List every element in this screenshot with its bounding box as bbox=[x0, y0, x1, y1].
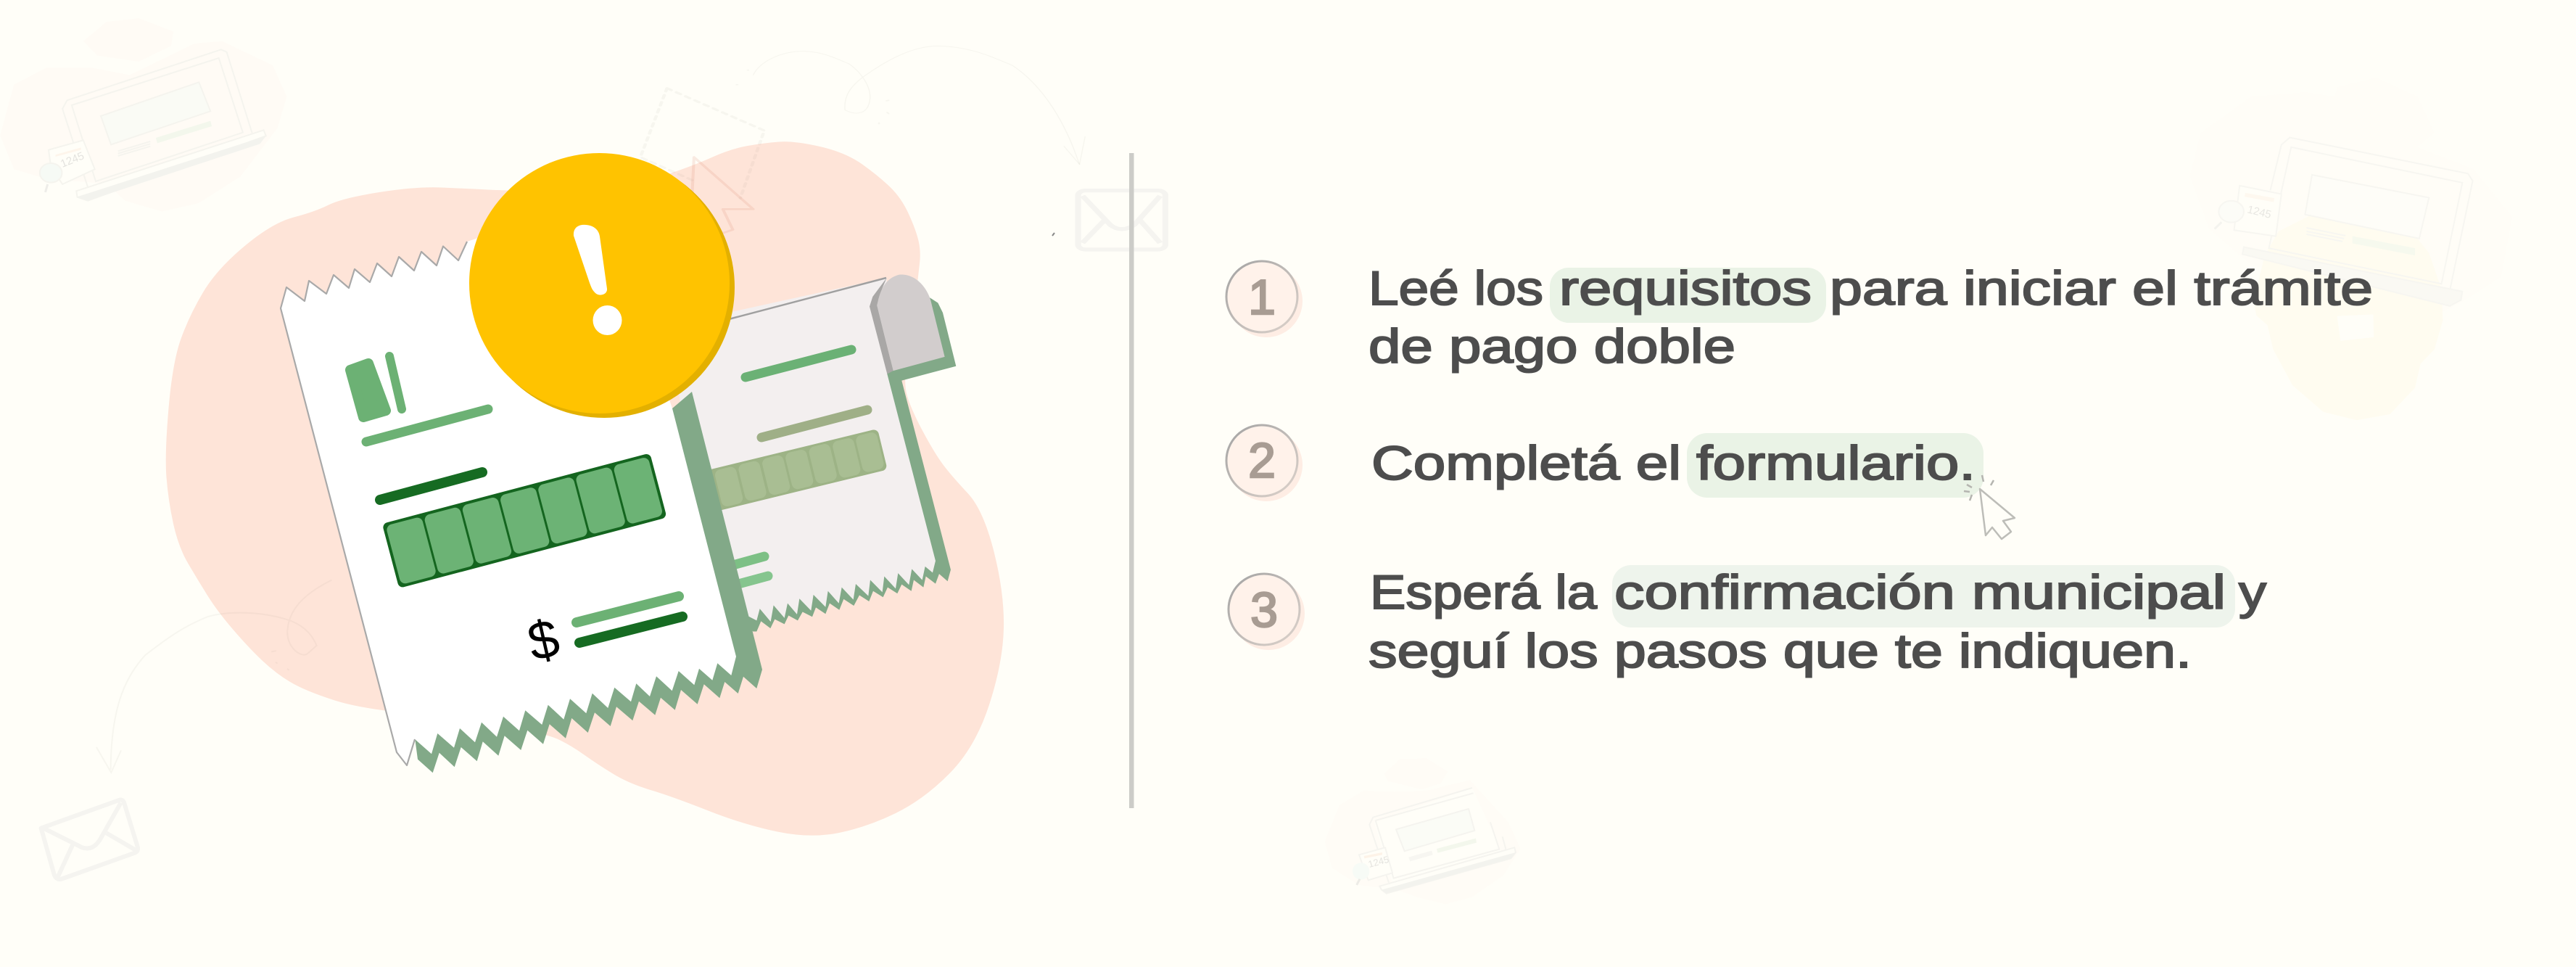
step 2 text: Completá el bbox=[1371, 436, 1681, 490]
step 3 text: Esperá la bbox=[1370, 565, 1597, 619]
main receipt code box bbox=[382, 453, 667, 588]
faint laptop illustration: top left bbox=[0, 18, 286, 212]
faint laptop illustration: top right with yellow blob: 1245 bbox=[2246, 203, 2273, 221]
main receipt outline bbox=[281, 242, 467, 765]
step 1 number: 1 bbox=[1248, 270, 1276, 325]
main receipt bars bbox=[366, 356, 682, 643]
step 3 text: y bbox=[2239, 565, 2266, 619]
back receipt bbox=[672, 274, 956, 632]
back receipt paper bbox=[672, 278, 936, 622]
back receipt green backing bbox=[701, 297, 956, 632]
step 3 text bbox=[1368, 565, 2266, 678]
back receipt curl bbox=[870, 274, 945, 374]
faint arrow and envelope: bottom left bbox=[41, 580, 331, 879]
step 2 text: formulario. bbox=[1696, 436, 1976, 490]
back receipt bars bbox=[725, 350, 867, 588]
icon: click cursor bbox=[1964, 475, 2015, 539]
step 3 text: confirmación municipal bbox=[1614, 565, 2226, 619]
faint laptop illustration: bottom centre: 1245 bbox=[1367, 854, 1390, 870]
back receipt top edge bbox=[729, 278, 886, 319]
exclamation mark bbox=[574, 225, 622, 335]
pink background blob bbox=[166, 141, 1004, 836]
step 2 text bbox=[1371, 436, 1976, 490]
step 1 text: para iniciar el trámite bbox=[1830, 261, 2373, 315]
dollar sign: $ bbox=[522, 607, 565, 672]
step 1 bbox=[1226, 261, 2373, 373]
step 3 number bbox=[1229, 574, 1305, 650]
main receipt bbox=[281, 197, 762, 773]
step 3 bbox=[1229, 565, 2266, 678]
step 3 text: seguí los pasos que te indiquen. bbox=[1368, 624, 2192, 678]
back receipt code box bbox=[701, 429, 888, 513]
highlight: formulario bbox=[1687, 433, 1983, 498]
main receipt green backing bbox=[415, 392, 762, 773]
step 1 text: requisitos bbox=[1559, 261, 1812, 315]
badge face bbox=[469, 153, 730, 413]
faint laptop illustration: bottom centre bbox=[1325, 758, 1521, 905]
main receipt paper bbox=[281, 197, 736, 765]
step 2 number: 2 bbox=[1248, 433, 1276, 488]
faint laptop illustration: top right with yellow blob bbox=[2189, 78, 2512, 420]
main receipt logo card bbox=[350, 363, 386, 417]
step 1 text bbox=[1368, 261, 2373, 373]
step 2 bbox=[1226, 425, 2015, 539]
step 1 text: Leé los bbox=[1368, 261, 1543, 315]
step 1 number bbox=[1226, 261, 1303, 337]
highlight: confirmación municipal bbox=[1612, 565, 2235, 627]
faint arrow, plane and envelope: top centre bbox=[640, 46, 1165, 250]
highlight: requisitos bbox=[1550, 268, 1826, 323]
faint laptop illustration: top left: 1245 bbox=[59, 149, 86, 170]
step 2 number bbox=[1226, 425, 1303, 501]
warning badge bbox=[469, 153, 735, 418]
badge shadow bbox=[474, 157, 735, 418]
step 1 text: de pago doble bbox=[1368, 319, 1735, 373]
vertical divider bbox=[1129, 153, 1134, 808]
step 3 number: 3 bbox=[1250, 583, 1278, 638]
